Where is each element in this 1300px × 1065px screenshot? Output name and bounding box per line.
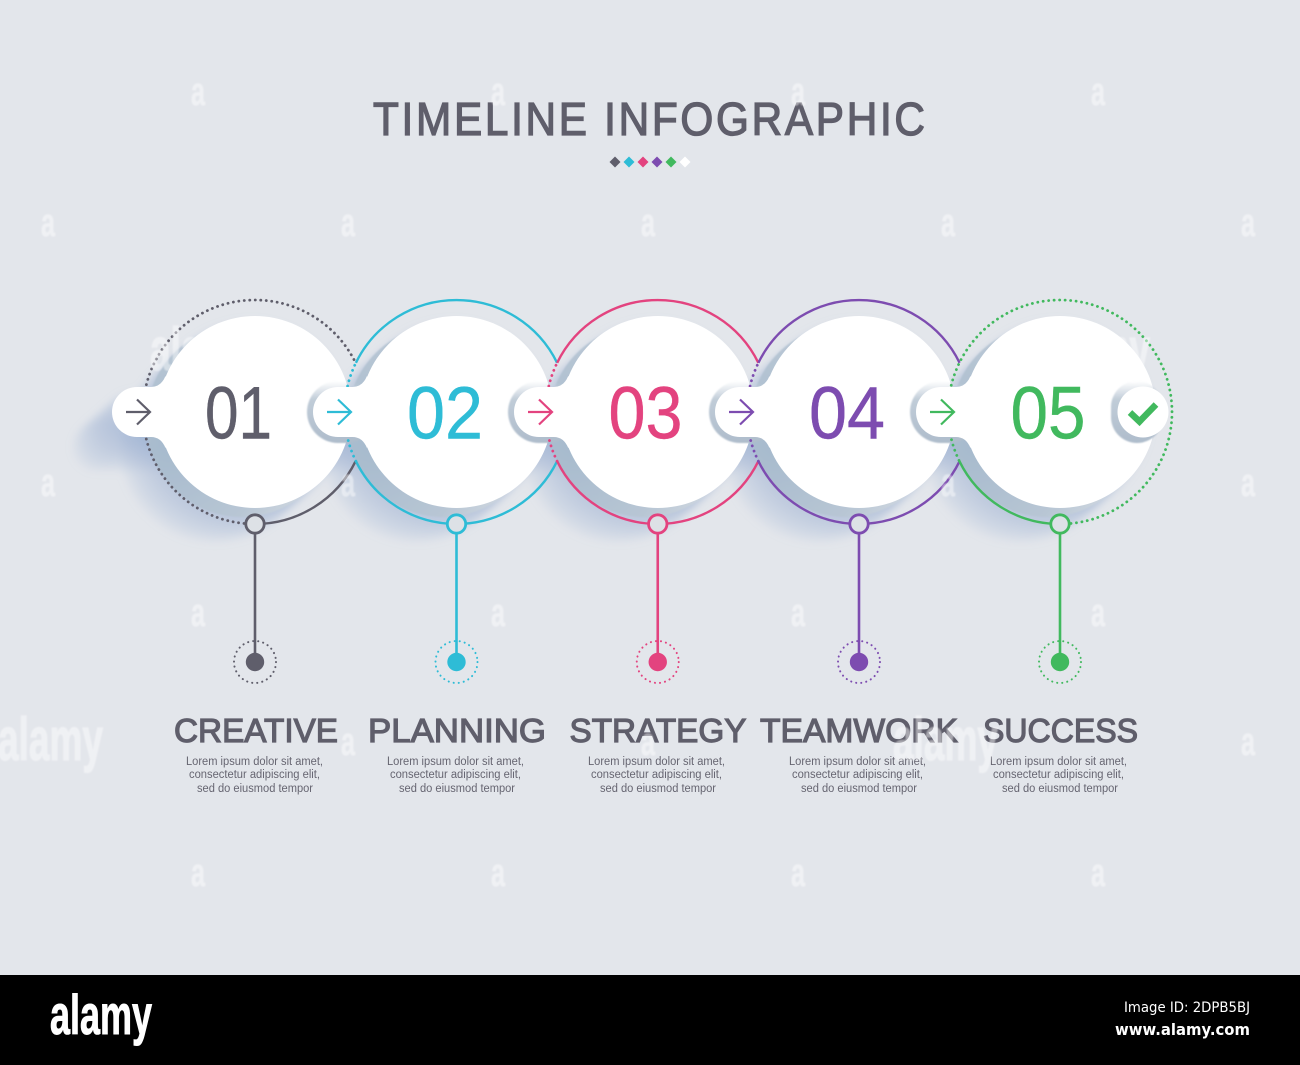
watermark: a xyxy=(191,70,205,114)
arrow 4 xyxy=(729,400,753,424)
watermark xyxy=(0,70,1255,895)
watermark: a xyxy=(491,851,505,895)
check tab shadow xyxy=(1111,381,1163,443)
circle shadow 3 xyxy=(549,325,741,517)
label: teamwork: consectetur adipiscing elit, xyxy=(792,769,923,781)
watermark: alamy xyxy=(1045,316,1150,383)
footer logo: alamy xyxy=(50,983,152,1046)
watermark: a xyxy=(941,461,955,505)
circle shadow 1 xyxy=(146,325,338,517)
label: strategy xyxy=(570,712,746,795)
title: TIMELINE INFOGRAPHIC xyxy=(373,94,925,145)
number 05: 05 xyxy=(1010,372,1086,454)
label: strategy: STRATEGY xyxy=(570,712,746,749)
ring 4 xyxy=(747,300,960,524)
label: planning: consectetur adipiscing elit, xyxy=(390,769,521,781)
label: creative: Lorem ipsum dolor sit amet, xyxy=(186,756,323,768)
label: success xyxy=(983,712,1138,795)
icon: check mark xyxy=(1130,404,1156,422)
tab shadow 4 xyxy=(709,381,779,443)
long shadows xyxy=(72,320,1152,543)
watermark: a xyxy=(191,851,205,895)
label: success: consectetur adipiscing elit, xyxy=(993,769,1124,781)
connector 1 xyxy=(234,515,276,683)
number 02: 02 xyxy=(407,372,483,454)
tab shadow 3 xyxy=(508,381,578,443)
arrow 2 xyxy=(327,400,351,424)
label: planning: sed do eiusmod tempor xyxy=(399,783,515,795)
watermark: a xyxy=(1241,720,1255,764)
watermark: alamy xyxy=(893,706,998,773)
label: teamwork: sed do eiusmod tempor xyxy=(801,783,917,795)
number 04: 04 xyxy=(809,372,885,454)
tab shadow 2 xyxy=(307,381,377,443)
watermark: a xyxy=(491,70,505,114)
label: success: sed do eiusmod tempor xyxy=(1002,783,1118,795)
watermark: a xyxy=(641,461,655,505)
circle shadow 4 xyxy=(750,325,942,517)
arrow 3 xyxy=(528,400,552,424)
label: strategy: sed do eiusmod tempor xyxy=(600,783,716,795)
label: planning: Lorem ipsum dolor sit amet, xyxy=(387,756,524,768)
white disc and tab 4 xyxy=(715,316,955,508)
arrow 1 xyxy=(126,400,150,424)
label: success: Lorem ipsum dolor sit amet, xyxy=(990,756,1127,768)
footer bar xyxy=(0,975,1300,1065)
label: strategy: consectetur adipiscing elit, xyxy=(591,769,722,781)
step 4: teamwork xyxy=(709,300,960,524)
watermark: a xyxy=(941,201,955,245)
label: success: SUCCESS xyxy=(983,712,1138,749)
watermark: a xyxy=(191,591,205,635)
label: planning xyxy=(368,712,546,795)
white disc and tab 2 xyxy=(313,316,552,508)
watermark: a xyxy=(341,201,355,245)
connector 4 xyxy=(838,515,880,683)
watermark: a xyxy=(1091,591,1105,635)
arrow 5 xyxy=(930,400,954,424)
watermark: a xyxy=(41,461,55,505)
label: creative: sed do eiusmod tempor xyxy=(197,783,313,795)
watermark: a xyxy=(641,201,655,245)
watermark: a xyxy=(1091,70,1105,114)
watermark: a xyxy=(41,201,55,245)
step 1: creative xyxy=(112,300,356,524)
watermark: a xyxy=(341,720,355,764)
circle shadow 5 xyxy=(951,325,1143,517)
white disc and tab 3 xyxy=(514,316,754,508)
watermark: alamy xyxy=(0,706,103,773)
check tab xyxy=(1118,386,1168,438)
connector 3 xyxy=(637,515,679,683)
watermark: a xyxy=(641,720,655,764)
site url: www.alamy.com xyxy=(1115,1020,1250,1039)
image id: Image ID: 2DPB5BJ xyxy=(1124,1000,1250,1016)
watermark: a xyxy=(1241,461,1255,505)
label: teamwork: Lorem ipsum dolor sit amet, xyxy=(789,756,926,768)
circle shadow 2 xyxy=(348,325,540,517)
label: creative: consectetur adipiscing elit, xyxy=(189,769,320,781)
connector 5 xyxy=(1039,515,1081,683)
ring 5 xyxy=(948,300,1172,524)
white disc and tab 5 xyxy=(916,316,1156,508)
number 01: 01 xyxy=(205,372,272,454)
tab shadow 5 xyxy=(910,381,980,443)
watermark: a xyxy=(491,591,505,635)
step 2: planning xyxy=(307,300,557,524)
white disc and tab 1 xyxy=(112,316,351,508)
ring 2 xyxy=(345,300,557,524)
label: creative xyxy=(174,712,338,795)
step 3: strategy xyxy=(508,300,758,524)
watermark: a xyxy=(791,591,805,635)
label: teamwork xyxy=(760,712,958,795)
label: planning: PLANNING xyxy=(368,712,546,749)
ring 3 xyxy=(546,300,758,524)
watermark: a xyxy=(1241,201,1255,245)
title diamonds xyxy=(610,156,690,168)
watermark: a xyxy=(791,851,805,895)
connector 2 xyxy=(436,515,478,683)
ring 1 xyxy=(143,300,356,524)
number 03: 03 xyxy=(608,372,682,454)
label: strategy: Lorem ipsum dolor sit amet, xyxy=(588,756,725,768)
step 5: success xyxy=(910,300,1172,524)
watermark: a xyxy=(341,461,355,505)
label: creative: CREATIVE xyxy=(174,712,338,749)
watermark: a xyxy=(1091,851,1105,895)
watermark: alamy xyxy=(150,316,255,383)
watermark: a xyxy=(791,70,805,114)
label: teamwork: TEAMWORK xyxy=(760,712,958,749)
